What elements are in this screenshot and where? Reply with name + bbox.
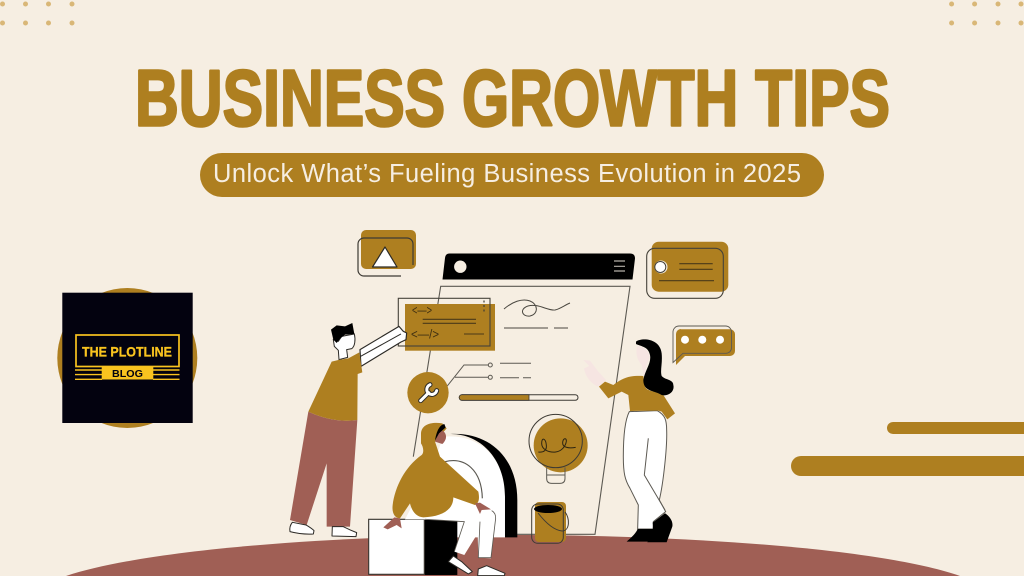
trousers	[405, 500, 496, 558]
code card	[398, 298, 495, 351]
dots: top right	[949, 2, 1024, 26]
ground	[66, 535, 960, 576]
woman shirt and hair	[599, 339, 675, 419]
icon: video play card	[358, 230, 416, 276]
decorative bar: upper right	[887, 422, 1024, 434]
woman skin	[583, 346, 650, 387]
progress bar	[459, 395, 578, 400]
dots: top left	[0, 2, 74, 26]
subtitle pill	[200, 153, 824, 197]
signature and lines	[504, 300, 570, 328]
main page panel	[413, 286, 630, 534]
woman pants and shoes	[623, 411, 672, 542]
logo: The Plotline Blog	[57, 288, 197, 428]
icon: bucket	[532, 502, 568, 543]
icon: wrench badge	[407, 372, 449, 413]
man shirt	[308, 352, 362, 421]
list lines with nodes	[447, 363, 531, 387]
chair arch	[425, 436, 505, 537]
shoes	[448, 556, 505, 576]
face and hair	[435, 429, 446, 444]
figure: sitting woman and chair	[369, 423, 517, 576]
icon: speech bubble	[673, 326, 735, 365]
man trousers	[290, 412, 357, 527]
logo name: THE PLOTLINE	[82, 345, 172, 360]
hands	[383, 503, 491, 529]
code tag top: <—>	[412, 302, 432, 318]
code tag bottom: <—/>	[411, 326, 439, 342]
figure: man reaching	[290, 323, 407, 537]
cube	[424, 520, 457, 575]
figure: standing woman pointing	[583, 339, 675, 542]
icon: profile card	[647, 242, 728, 298]
decorative bar: lower right	[791, 456, 1024, 476]
subtitle text: Unlock What’s Fueling Business Evolution in 2025	[213, 160, 801, 188]
man shoes	[290, 522, 357, 537]
icon: light bulb	[529, 414, 588, 483]
man upper body details	[331, 323, 407, 366]
browser title bar	[442, 254, 635, 280]
hoodie	[392, 423, 479, 518]
logo tag: BLOG	[112, 368, 143, 380]
